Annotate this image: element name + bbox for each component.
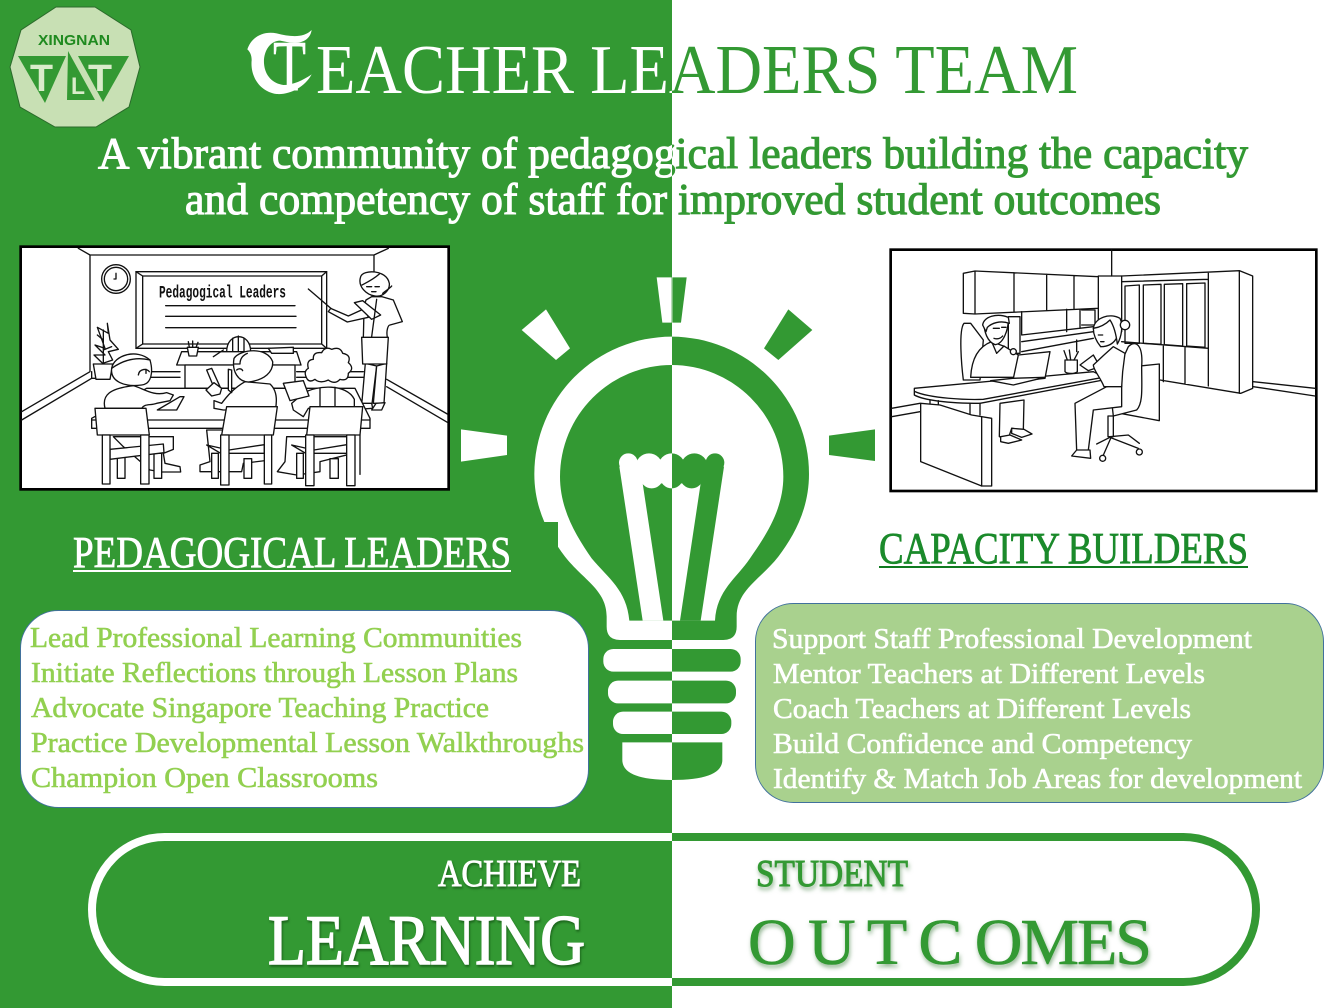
logo: Xingnan TLT: T <box>88 58 112 100</box>
teacher <box>328 272 402 410</box>
panel: capacity builder duties: Mentor Teachers at Different Levels <box>773 658 1205 690</box>
chalkboard <box>136 272 327 348</box>
panel: capacity builder duties: Build Confidence and Competency <box>773 728 1193 760</box>
woman seated in swivel chair <box>1072 316 1142 461</box>
subtitle: A vibrant community of pedagogical leaders building the capacity <box>98 129 1248 178</box>
heading: pedagogical leaders: PEDAGOGICAL LEADERS <box>73 528 511 577</box>
panel: pedagogical leader duties: Champion Open Classrooms <box>31 762 378 794</box>
heading mask notch on bulb <box>450 522 558 554</box>
office cabinets <box>892 250 1315 417</box>
subtitle: and competency of staff for improved student outcomes <box>185 175 1161 224</box>
rays <box>461 277 875 462</box>
chair left <box>95 408 164 484</box>
man seated <box>961 315 1032 443</box>
bulb screw base <box>603 649 741 780</box>
desk far return <box>1120 364 1159 421</box>
filament <box>619 453 724 621</box>
panel: pedagogical leader duties: Initiate Reflections through Lesson Plans <box>31 657 518 689</box>
panel: capacity builder duties: Identify & Match Job Areas for development <box>773 763 1302 795</box>
heading: capacity builders: CAPACITY BUILDERS <box>879 524 1248 573</box>
pointer <box>308 289 332 309</box>
chair right <box>292 407 363 486</box>
outcome text: achieve learning: LEARNING <box>268 902 585 980</box>
title: T <box>273 26 306 106</box>
logo: Xingnan TLT: T <box>30 58 53 100</box>
panel: capacity builder duties: Coach Teachers at Different Levels <box>773 693 1191 725</box>
panel: capacity builder duties <box>756 604 1324 802</box>
chalkboard: Pedagogical Leaders <box>159 285 286 304</box>
logo: Xingnan TLT: XINGNAN <box>38 32 110 49</box>
outcome text: student outcomes <box>748 853 1152 979</box>
outcome pill frame <box>92 837 1256 982</box>
teacher's desk <box>177 336 301 388</box>
illustration: classroom with pedagogical leader <box>21 247 449 489</box>
left green background <box>0 0 672 1008</box>
panel: pedagogical leader duties <box>20 610 588 808</box>
outcome text: achieve learning <box>268 853 585 980</box>
pencil cup <box>1064 350 1100 373</box>
desk top <box>914 372 1103 486</box>
student left <box>95 354 184 484</box>
outcome text: student outcomes: O U T C OMES <box>748 906 1152 979</box>
subtitle <box>98 129 1248 224</box>
panel: pedagogical leader duties: Advocate Singapore Teaching Practice <box>31 692 489 724</box>
title: EACHER LEADERS TEAM <box>316 32 1078 109</box>
light bulb <box>461 277 875 780</box>
classroom table <box>92 388 370 428</box>
laptop <box>991 352 1050 385</box>
student right <box>277 348 363 486</box>
student centre <box>200 351 277 485</box>
chair centre <box>207 407 277 485</box>
logo: Xingnan TLT <box>10 7 140 127</box>
panel: pedagogical leader duties: Practice Developmental Lesson Walkthroughs <box>31 727 584 759</box>
panel: capacity builder duties: Support Staff Professional Development <box>772 623 1252 655</box>
bulb glass ring <box>534 337 809 640</box>
clock <box>102 265 130 293</box>
outcome text: student outcomes: STUDENT <box>756 853 908 895</box>
illustration: staff coaching in office <box>891 250 1316 491</box>
logo: Xingnan TLT: L <box>71 73 85 100</box>
outcome text: achieve learning: ACHIEVE <box>438 853 581 895</box>
panel: pedagogical leader duties: Lead Professional Learning Communities <box>30 622 522 654</box>
plant <box>93 323 118 379</box>
